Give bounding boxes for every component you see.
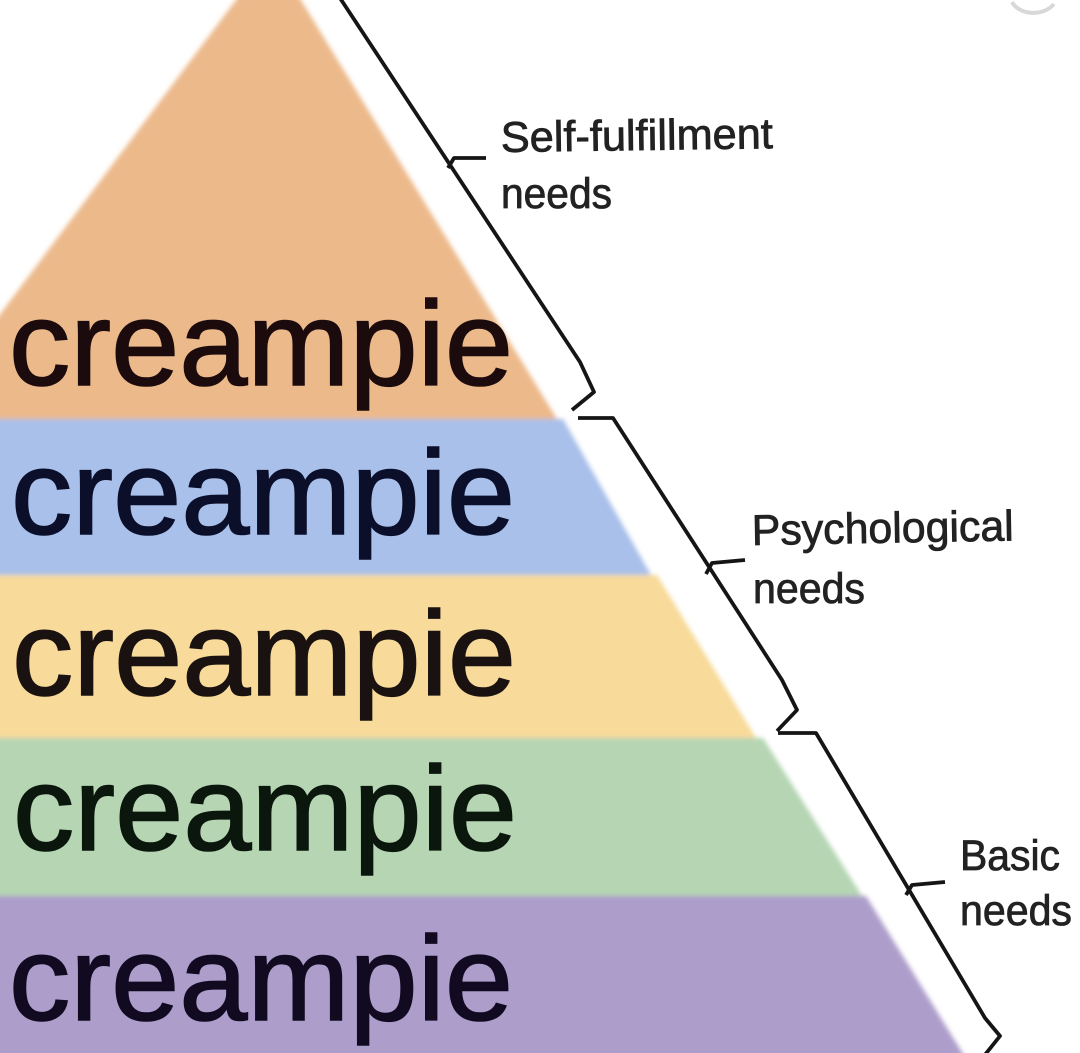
bracket: basic xyxy=(778,733,1000,1053)
label: basic needs: Basic xyxy=(960,832,1060,880)
label: psychological needs xyxy=(751,502,1014,613)
band: top orange xyxy=(0,0,557,419)
icon: corner watermark xyxy=(1012,2,1054,13)
label: self-fulfillment needs: needs xyxy=(501,170,612,218)
band: yellow xyxy=(0,575,756,738)
level text: creampie 1: creampie xyxy=(9,277,513,411)
label: psychological needs: needs xyxy=(753,565,865,613)
level text: creampie 4: creampie xyxy=(13,742,517,876)
level text: creampie 3: creampie xyxy=(12,587,516,721)
label: self-fulfillment needs: Self-fulfillment xyxy=(500,110,773,162)
label: basic needs: needs xyxy=(960,887,1072,935)
level text: creampie 2: creampie xyxy=(11,426,515,560)
label: self-fulfillment needs xyxy=(500,110,773,218)
bracket: psychological xyxy=(578,418,797,731)
band: purple xyxy=(0,896,968,1053)
level text: creampie 5: creampie xyxy=(9,912,513,1046)
band: blue xyxy=(0,419,651,575)
band: green xyxy=(0,738,862,896)
label: basic needs xyxy=(960,832,1072,935)
label: psychological needs: Psychological xyxy=(751,502,1014,555)
bracket: self-fulfillment xyxy=(338,0,594,410)
